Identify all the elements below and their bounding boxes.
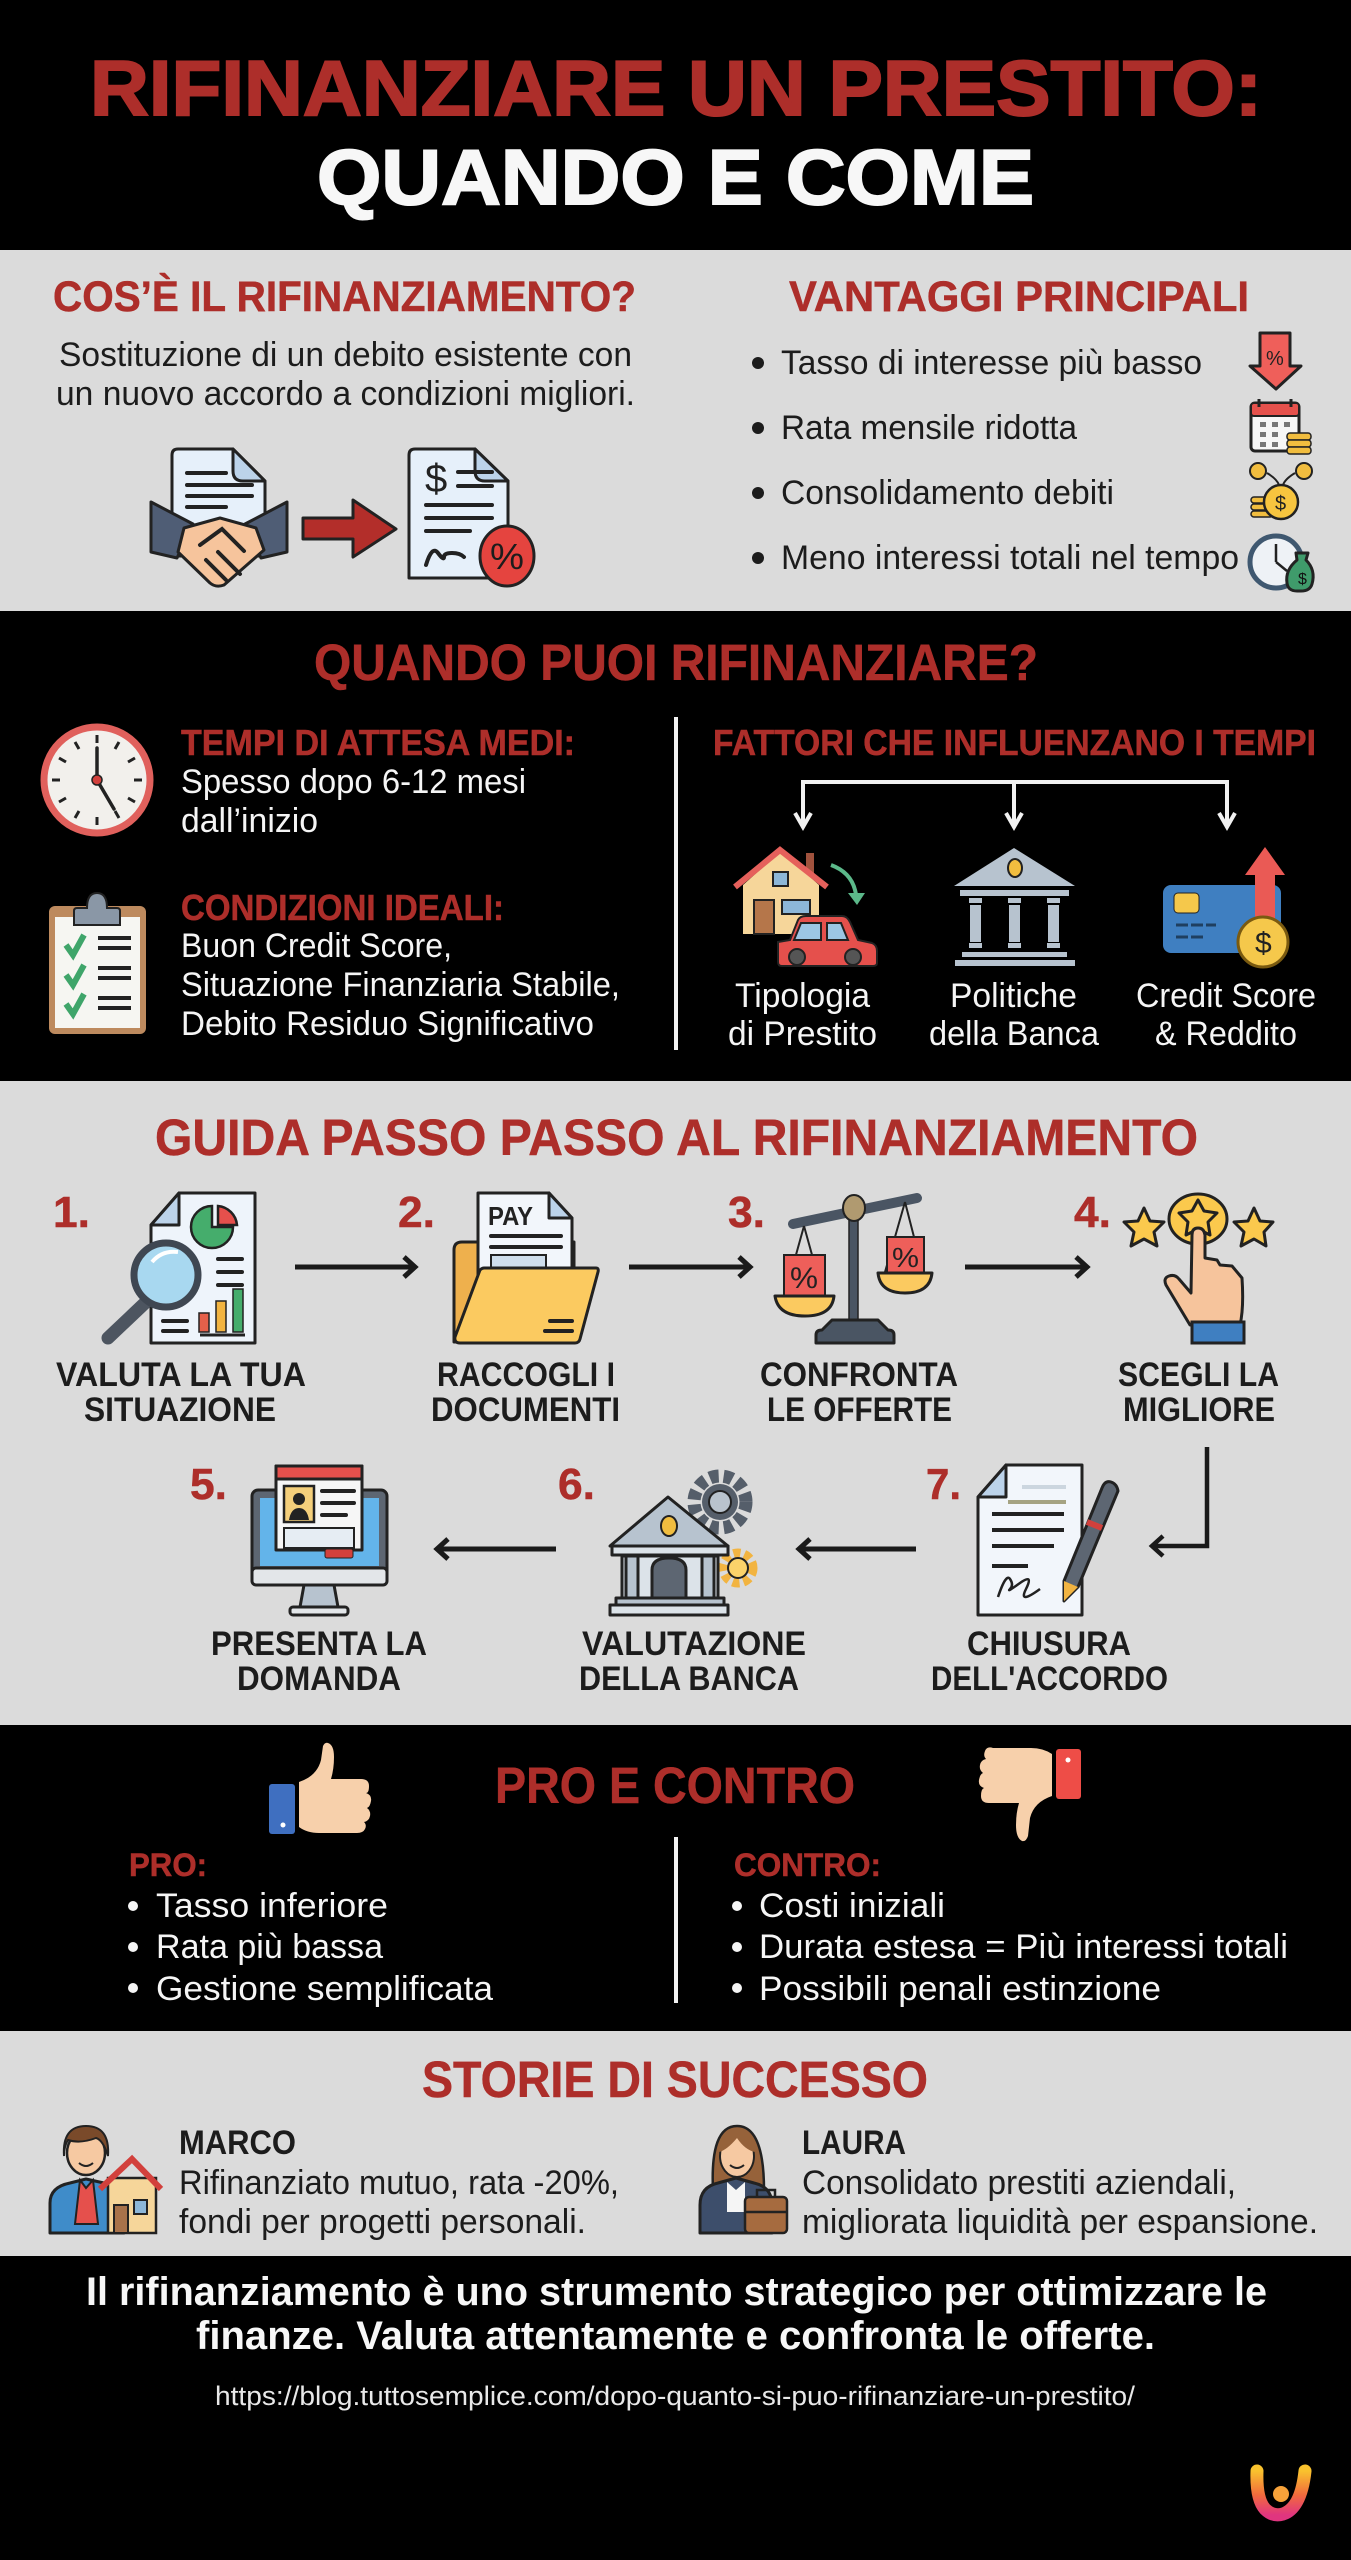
icon: documents folder: PAY	[488, 1201, 533, 1231]
icon: handshake with document	[151, 449, 287, 586]
list: pros	[128, 1847, 493, 2008]
icon: new contract with percent: %	[490, 536, 524, 577]
icon: bank	[954, 848, 1075, 966]
icon: house and car	[735, 850, 877, 966]
icon: online application monitor	[252, 1466, 387, 1615]
icon: clock and money bag	[1250, 536, 1313, 591]
icon: bank with gears	[610, 1476, 753, 1615]
list: advantages: Tasso di interesse più basso	[781, 344, 1202, 382]
text block: conclusion: finanze. Valuta attentamente e confronta le offerte.	[196, 2314, 1155, 2358]
text block: definition	[56, 336, 635, 413]
arrow: step 1 to 2	[295, 1257, 415, 1277]
step 4	[1074, 1188, 1279, 1429]
step 3	[728, 1188, 958, 1429]
list: pros: Rata più bassa	[156, 1928, 383, 1966]
arrow: red transition	[303, 500, 396, 557]
panel: header	[90, 44, 1262, 221]
heading: pro e contro: PRO E CONTRO	[495, 1757, 855, 1814]
panel: pros and cons	[128, 1743, 1288, 2008]
panel: conclusion	[86, 2270, 1305, 2515]
labels: factors: & Reddito	[1155, 1015, 1297, 1053]
icon: thumbs up	[269, 1743, 371, 1834]
icon: new contract with percent: $	[425, 457, 447, 501]
list: cons: Possibili penali estinzione	[759, 1970, 1161, 2008]
step 2: 2.	[398, 1188, 435, 1237]
step 1: VALUTA LA TUA	[56, 1356, 306, 1394]
step 5: DOMANDA	[237, 1660, 401, 1698]
step 2: RACCOGLI I	[437, 1356, 615, 1394]
text block: Laura: migliorata liquidità per espansione.	[802, 2203, 1318, 2241]
step 7: CHIUSURA	[967, 1625, 1131, 1663]
title: RIFINANZIARE UN PRESTITO:	[90, 44, 1262, 132]
text block: waiting times	[181, 722, 575, 840]
text block: ideal conditions	[181, 887, 620, 1043]
step 4: SCEGLI LA	[1118, 1356, 1279, 1394]
labels: factors	[728, 977, 1316, 1053]
list: cons: Durata estesa = Più interessi totali	[759, 1928, 1288, 1966]
heading: vantaggi principali: VANTAGGI PRINCIPALI	[789, 273, 1249, 321]
step 3: CONFRONTA	[760, 1356, 958, 1394]
labels: factors: della Banca	[929, 1015, 1099, 1053]
icon: clock and money bag: $	[1298, 571, 1307, 588]
text block: ideal conditions: Debito Residuo Significativo	[181, 1005, 594, 1043]
source url: https://blog.tuttosemplice.com/dopo-quanto-si-puo-rifinanziare-un-prestito/	[215, 2381, 1136, 2411]
list: cons: CONTRO:	[734, 1847, 881, 1883]
step 6: DELLA BANCA	[579, 1660, 799, 1698]
list: pros: Gestione semplificata	[156, 1970, 493, 2008]
text block: Marco: fondi per progetti personali.	[179, 2203, 586, 2241]
text block: conclusion	[86, 2270, 1267, 2358]
step 7: 7.	[926, 1460, 961, 1509]
icon: thumbs down	[979, 1747, 1081, 1841]
arrows: factors bracket	[795, 782, 1235, 827]
text block: definition: Sostituzione di un debito esistente con	[59, 336, 632, 374]
step 7	[926, 1460, 1168, 1698]
step 7: DELL'ACCORDO	[931, 1660, 1168, 1698]
icon: lower rate arrow	[1250, 333, 1301, 389]
icon: clipboard checklist	[49, 893, 146, 1034]
title: QUANDO E COME	[317, 133, 1034, 221]
text block: waiting times: TEMPI DI ATTESA MEDI:	[181, 722, 575, 763]
step 2: DOCUMENTI	[431, 1391, 620, 1429]
list: pros: Tasso inferiore	[156, 1887, 388, 1925]
step 5	[190, 1460, 427, 1698]
icon: balance scale	[775, 1195, 932, 1343]
icon: balance scale: %	[892, 1242, 919, 1273]
arrow: step 7 to 6	[799, 1539, 916, 1559]
step 3: 3.	[728, 1188, 765, 1237]
step 1: 1.	[53, 1188, 90, 1237]
labels: factors: Credit Score	[1136, 977, 1316, 1015]
text block: Marco: MARCO	[179, 2124, 296, 2162]
text block: definition: un nuovo accordo a condizioni migliori.	[56, 375, 635, 413]
text block: ideal conditions: Buon Credit Score,	[181, 927, 452, 965]
step 4: 4.	[1074, 1188, 1111, 1237]
step 4: MIGLIORE	[1123, 1391, 1275, 1429]
icon: new contract with percent	[409, 449, 534, 586]
panel: success stories	[0, 2031, 1351, 2256]
step 6: 6.	[558, 1460, 595, 1509]
icon: documents folder	[454, 1193, 598, 1343]
step 5: PRESENTA LA	[211, 1625, 427, 1663]
arrow: step 3 to 4	[965, 1257, 1087, 1277]
text block: ideal conditions: CONDIZIONI IDEALI:	[181, 887, 504, 928]
step 1	[53, 1188, 306, 1429]
text block: waiting times: Spesso dopo 6-12 mesi	[181, 763, 526, 801]
list: cons: Costi iniziali	[759, 1887, 945, 1925]
text block: Laura	[802, 2124, 1318, 2241]
icon: lower rate arrow: %	[1266, 348, 1284, 370]
arrow: step 4 to 7 elbow	[1152, 1447, 1207, 1556]
text block: Marco	[179, 2124, 619, 2241]
list: advantages: Meno interessi totali nel tempo	[781, 539, 1239, 577]
step 1: SITUAZIONE	[84, 1391, 276, 1429]
heading: cos'è il rifinanziamento: COS’È IL RIFINANZIAMENTO?	[53, 273, 636, 321]
icon: coins consolidation: $	[1275, 493, 1286, 515]
icon: logo	[1257, 2471, 1305, 2515]
icon: credit card with arrow and coin	[1163, 847, 1288, 967]
list: advantages: Rata mensile ridotta	[781, 409, 1077, 447]
step 5: 5.	[190, 1460, 227, 1509]
icon: clock	[44, 727, 150, 833]
step 6: VALUTAZIONE	[582, 1625, 806, 1663]
step 2	[398, 1188, 620, 1429]
icon: Marco with house	[50, 2126, 161, 2233]
text block: Laura: Consolidato prestiti aziendali,	[802, 2164, 1236, 2202]
list: cons	[732, 1847, 1288, 2008]
step 3: LE OFFERTE	[767, 1391, 952, 1429]
labels: factors: di Prestito	[728, 1015, 877, 1053]
icon: balance scale: %	[790, 1262, 818, 1295]
icon: hand picking star	[1124, 1194, 1273, 1343]
arrow: step 2 to 3	[629, 1257, 750, 1277]
text block: conclusion: Il rifinanziamento è uno strumento strategico per ottimizzare le	[86, 2270, 1267, 2314]
panel: when you can refinance	[44, 634, 1316, 1053]
arrow: step 6 to 5	[437, 1539, 556, 1559]
text block: waiting times: dall’inizio	[181, 802, 318, 840]
text block: ideal conditions: Situazione Finanziaria Stabile,	[181, 966, 620, 1004]
icon: Laura with briefcase	[700, 2126, 787, 2233]
list: advantages: Consolidamento debiti	[781, 474, 1114, 512]
list: advantages	[752, 344, 1239, 577]
title	[90, 44, 1262, 221]
icon: credit card with arrow and coin: $	[1255, 927, 1272, 960]
icon: analysis document	[108, 1193, 255, 1343]
panel: definition and advantages	[0, 250, 1351, 611]
heading: quando puoi rifinanziare: QUANDO PUOI RIFINANZIARE?	[314, 634, 1038, 691]
text block: Laura: LAURA	[802, 2124, 906, 2162]
step 6	[558, 1460, 806, 1698]
icon: coins consolidation	[1250, 463, 1312, 519]
list: pros: PRO:	[129, 1847, 207, 1883]
labels: factors: Politiche	[950, 977, 1077, 1015]
heading: storie di successo: STORIE DI SUCCESSO	[422, 2051, 928, 2108]
text block: Marco: Rifinanziato mutuo, rata -20%,	[179, 2164, 619, 2202]
icon: signed contract and pen	[978, 1465, 1118, 1615]
heading: guide: GUIDA PASSO PASSO AL RIFINANZIAMENTO	[155, 1109, 1198, 1166]
panel: step by step guide	[0, 1081, 1351, 1725]
icon: calendar with coins	[1251, 399, 1311, 454]
heading: factors: FATTORI CHE INFLUENZANO I TEMPI	[713, 722, 1316, 763]
labels: factors: Tipologia	[735, 977, 870, 1015]
